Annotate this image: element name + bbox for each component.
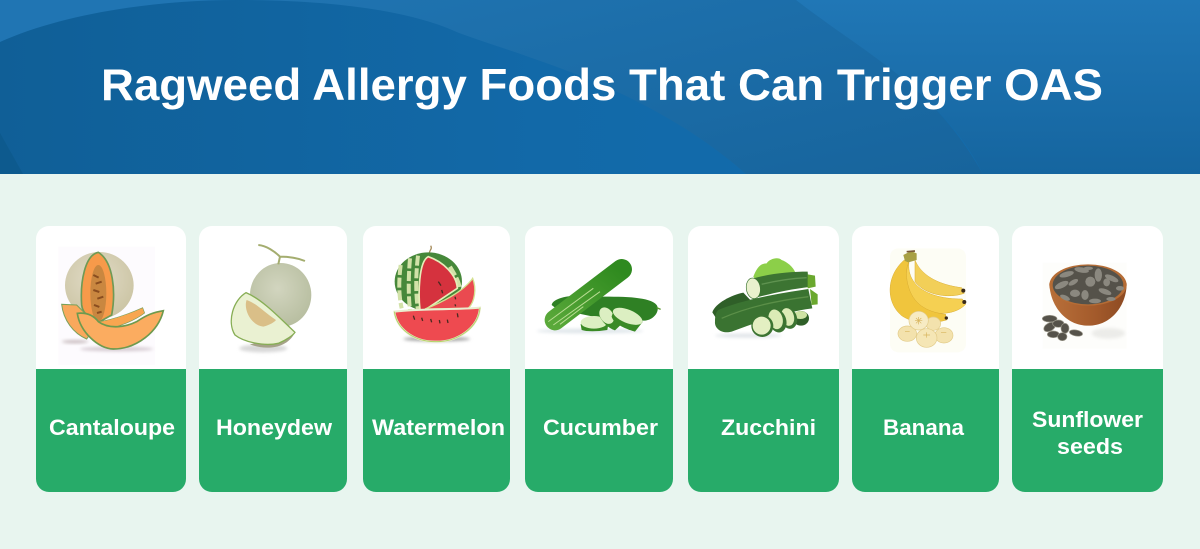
icon: sunflower seeds (1042, 263, 1127, 349)
card: sunflower seeds (1012, 226, 1163, 492)
card: honeydew (199, 226, 347, 492)
icon: watermelon (394, 246, 480, 342)
label: watermelon: Watermelon (372, 415, 505, 440)
label: banana: Banana (883, 415, 964, 440)
label: zucchini: Zucchini (721, 415, 816, 440)
card: watermelon (363, 226, 510, 492)
icon: banana (890, 248, 966, 352)
label: cucumber: Cucumber (543, 415, 658, 440)
icon: cantaloupe (58, 247, 163, 365)
card: banana (852, 226, 999, 492)
icon: cucumber (537, 269, 661, 333)
card: zucchini (688, 226, 839, 492)
icon: honeydew (231, 245, 311, 352)
label: honeydew: Honeydew (216, 415, 333, 440)
icon: zucchini (712, 258, 818, 338)
label: sunflower seeds: Sunflower (1032, 407, 1143, 432)
title: Ragweed Allergy Foods That Can Trigger OAS (101, 61, 1103, 110)
card: cucumber (525, 226, 673, 492)
label: sunflower seeds: seeds (1057, 434, 1123, 459)
card: cantaloupe (36, 226, 186, 492)
label: sunflower seeds (1032, 407, 1143, 459)
label: cantaloupe: Cantaloupe (49, 415, 175, 440)
header banner (0, 0, 1200, 174)
